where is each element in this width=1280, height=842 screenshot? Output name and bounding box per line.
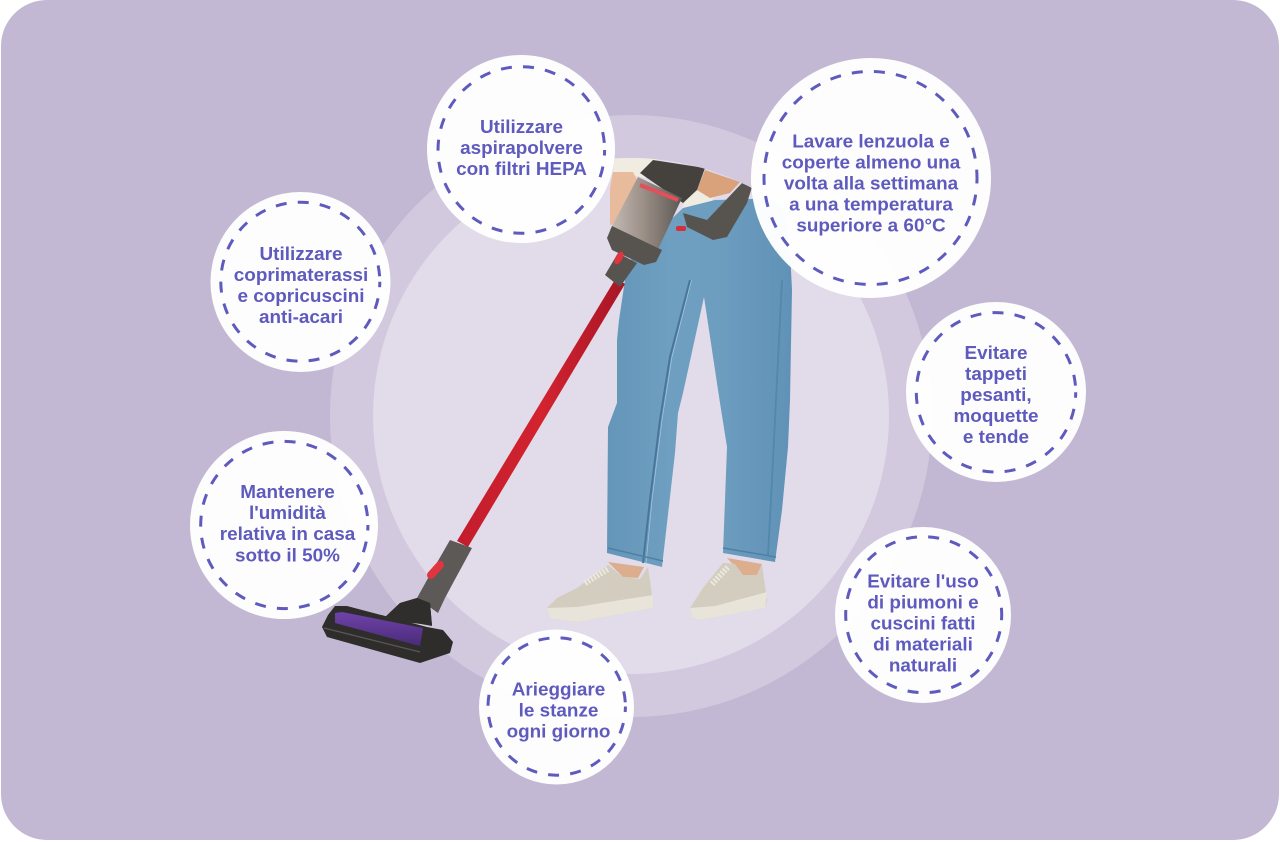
tip text: moquette [953, 406, 1039, 427]
white circle: humidity tip [190, 431, 378, 619]
tip text: coperte almeno una [782, 152, 961, 174]
illustration: person with vacuum cleaner [547, 156, 792, 622]
left ankle [608, 562, 644, 578]
vacuum floor head [322, 598, 453, 663]
tip text: naturali [889, 656, 957, 676]
white circle: ventilation tip [479, 630, 634, 784]
tip text: anti-acari [259, 307, 343, 328]
tip text: Evitare l'uso [867, 572, 979, 592]
tip text: e tende [963, 427, 1029, 448]
tip text: tappeti [965, 364, 1027, 385]
right ankle [727, 558, 762, 575]
red trigger [676, 226, 686, 231]
tip text: sotto il 50% [235, 546, 340, 566]
tip text: superiore a 60°C [796, 216, 946, 236]
white circle: carpets tip [906, 302, 1086, 482]
tip text: le stanze [519, 700, 598, 722]
vacuum upper connector [605, 250, 637, 287]
tip text: aspirapolvere [460, 138, 583, 159]
tip text: Utilizzare [260, 244, 342, 265]
tip text: ogni giorno [507, 722, 610, 742]
tip text: cuscini fatti [871, 614, 975, 634]
tip text: volta alla settimana [784, 174, 959, 194]
inner halo circle [373, 158, 889, 674]
left hand [610, 172, 637, 225]
tip text: Utilizzare [480, 117, 563, 138]
white circle: natural materials tip [835, 527, 1011, 703]
tip text: Mantenere [240, 482, 335, 503]
left shoe [547, 565, 653, 622]
tip text: di piumoni e [867, 592, 979, 614]
tip text: l'umidità [249, 503, 326, 524]
vacuum lower connector [382, 540, 472, 625]
vacuum handle [683, 183, 752, 240]
white circle: washing tip [751, 58, 991, 298]
tip text: Evitare [964, 343, 1028, 364]
outer halo circle [330, 115, 932, 717]
tip text: con filtri HEPA [456, 159, 587, 180]
right hand [697, 170, 740, 198]
white circle: vacuum cleaner tip [427, 55, 615, 243]
white circle: mattress cover tip [210, 192, 390, 372]
dust cup [607, 160, 705, 265]
tip text: relativa in casa [220, 524, 356, 545]
jeans [607, 198, 792, 567]
vacuum rod [457, 278, 625, 547]
sweater [613, 158, 714, 209]
tip text: e copricuscini [237, 286, 365, 307]
right shoe [690, 563, 767, 620]
tip text: Lavare lenzuola e [792, 132, 950, 152]
tip text: coprimaterassi [234, 265, 368, 286]
tip text: pesanti, [960, 385, 1032, 406]
tip text: a una temperatura [789, 194, 953, 216]
tip text: di materiali [873, 634, 973, 656]
tip text: Arieggiare [512, 680, 605, 700]
